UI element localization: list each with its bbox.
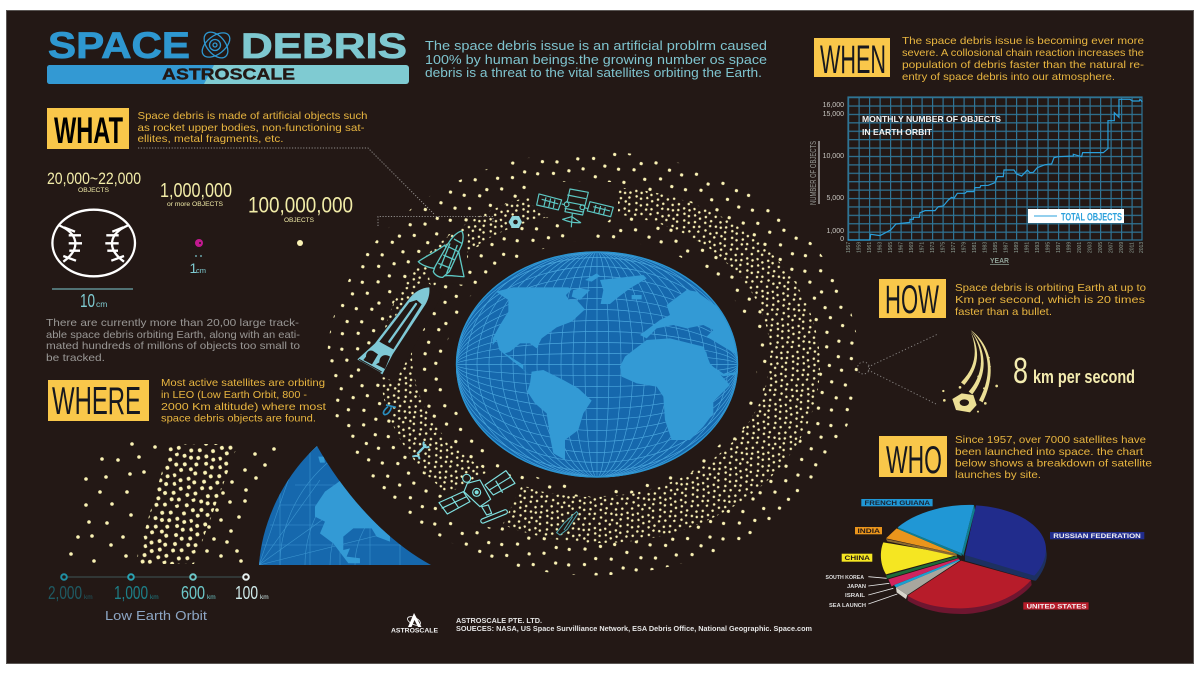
- what text: as rocket upper bodies, non-functioning sat-: [138, 122, 365, 134]
- sector grid: [259, 446, 401, 565]
- heading: when: WHEN: [820, 38, 886, 82]
- orbit altitude scale: 600: [181, 583, 205, 603]
- scale line: 10 cm: 10: [80, 291, 95, 311]
- y axis labels: 5,000: [826, 195, 844, 202]
- x axis labels: 2005: [1098, 242, 1104, 253]
- x axis labels: 1983: [982, 242, 988, 253]
- stat: 8 km per second: km per second: [1033, 367, 1135, 387]
- x axis labels: 1989: [1014, 242, 1020, 253]
- stat: 1,000,000 objects: [160, 180, 232, 208]
- what text: [138, 110, 368, 145]
- stat: 8 km per second: 8: [1013, 350, 1028, 391]
- heading: how: HOW: [885, 278, 939, 322]
- heading: what: [47, 108, 129, 151]
- icon: wrench: [412, 442, 429, 459]
- icon: space shuttle: [418, 231, 464, 277]
- where text: [161, 377, 326, 424]
- how text: Space debris is orbiting Earth at up to: [955, 282, 1146, 294]
- icon: atom: [198, 28, 234, 62]
- icon: tiny debris dot: [297, 240, 303, 246]
- orbit altitude scale: 1,000: [114, 583, 148, 603]
- footer credits: SOUECES: NASA, US Space Survilliance Network, ESA Debris Office, National Geographic. Space.com: [456, 626, 812, 633]
- pie chart: [868, 505, 1047, 614]
- y axis title: [809, 141, 819, 205]
- how text: Km per second, which is 20 times: [955, 294, 1145, 306]
- orbit altitude scale: km: [84, 594, 93, 601]
- footer credits: ASTROSCALE PTE. LTD.: [456, 618, 542, 625]
- tracking text: There are currently more than 20,00 large track-: [46, 317, 300, 329]
- icon: satellite bottom: [439, 471, 515, 524]
- intro text: debris is a threat to the vital satellites orbiting the Earth.: [425, 65, 762, 80]
- heading: who: [879, 436, 947, 482]
- pie small labels: [826, 575, 866, 609]
- pie small labels: SEA LAUNCH: [829, 603, 866, 609]
- icon: hammer fragment: [383, 405, 396, 415]
- y axis labels: 15,000: [823, 111, 844, 118]
- panel: how: [858, 278, 1146, 413]
- when text: severe. A collosional chain reaction increases the: [902, 47, 1144, 59]
- panel: when: [809, 35, 1145, 265]
- x axis labels: 1997: [1056, 242, 1062, 253]
- x axis title: YEAR: [990, 258, 1009, 265]
- pie label: french guiana: [861, 499, 933, 507]
- pie label: united states: UNITED STATES: [1026, 603, 1087, 610]
- who text: Since 1957, over 7000 satellites have: [955, 434, 1146, 446]
- y axis labels: [823, 102, 844, 243]
- title: SPACE: [48, 25, 190, 66]
- footer logo: [391, 613, 439, 634]
- x axis labels: 2013: [1139, 242, 1145, 253]
- x axis labels: 1981: [972, 242, 978, 253]
- x axis labels: [846, 242, 1145, 253]
- chart title: MONTHLY NUMBER OF OBJECTS: [862, 114, 1001, 124]
- orbit altitude scale: km: [207, 594, 216, 601]
- icon: bottle fragment: [557, 512, 578, 535]
- x axis labels: 1977: [951, 242, 957, 253]
- line chart: [809, 97, 1145, 265]
- y axis labels: 1,000: [826, 228, 844, 235]
- x axis labels: 1971: [920, 242, 926, 253]
- pie label: french guiana: FRENCH GUIANA: [864, 500, 930, 507]
- stat: 100,000,000 objects: OBJECTS: [284, 217, 315, 224]
- chart title: [862, 114, 1001, 137]
- how text: faster than a bullet.: [955, 306, 1052, 318]
- what text: Space debris is made of artificial objects such: [138, 110, 368, 122]
- x axis labels: 2009: [1119, 242, 1125, 253]
- pie small labels: ISRAIL: [845, 593, 866, 599]
- x axis labels: 2001: [1077, 242, 1083, 253]
- x axis labels: 1973: [930, 242, 936, 253]
- globe: [456, 252, 740, 478]
- footer logo: ASTROSCALE: [391, 628, 439, 634]
- x axis labels: 1985: [993, 242, 999, 253]
- icon: satellite top: [537, 189, 613, 227]
- x axis labels: 1979: [962, 242, 968, 253]
- chart title: IN EARTH ORBIT: [862, 127, 933, 137]
- pie label: india: [855, 527, 882, 535]
- tracking text: able space debris orbiting Earth, along with an eati-: [46, 329, 301, 341]
- intro text: [425, 38, 767, 80]
- scale line: 10 cm: [52, 289, 133, 311]
- title bar: astroscale: ASTROSCALE: [162, 66, 295, 84]
- heading: when: [814, 38, 890, 82]
- stat: 1,000,000 objects: 1,000,000: [160, 180, 232, 202]
- x axis labels: 1967: [898, 242, 904, 253]
- x axis labels: 2011: [1130, 242, 1136, 253]
- x axis labels: 1969: [909, 242, 915, 253]
- x axis labels: 1999: [1066, 242, 1072, 253]
- intro text: 100% by human beings.the growing number os space: [425, 52, 767, 67]
- pie label: russian federation: [1050, 532, 1144, 540]
- leo sparse debris: [71, 444, 274, 561]
- how text: [955, 282, 1146, 318]
- y axis labels: 16,000: [823, 102, 844, 109]
- where text: space debris objects are found.: [161, 412, 316, 424]
- pie label: china: CHINA: [844, 555, 870, 562]
- sector land: [315, 457, 390, 563]
- intro text: The space debris issue is an artificial problrm caused: [425, 38, 767, 53]
- stat: 1,000,000 objects: or more OBJECTS: [167, 201, 224, 208]
- pie label: russian federation: RUSSIAN FEDERATION: [1053, 533, 1141, 540]
- when text: population of debris faster than the natural re-: [902, 59, 1145, 71]
- icon: hex nut fragment: [508, 216, 522, 228]
- orbit altitude scale: [48, 574, 269, 603]
- stat: 20,000 objects: [47, 170, 141, 194]
- where text: 2000 Km altitude) where most: [161, 401, 326, 413]
- pie label: united states: [1023, 602, 1089, 610]
- tracking text: mated hundreds of millons of objects too small to: [46, 340, 300, 352]
- where text: Most active satellites are orbiting: [161, 377, 325, 389]
- y axis labels: 10,000: [823, 153, 844, 160]
- panel: what: [46, 108, 493, 364]
- y axis title: NUMBER OF OBJECTS: [809, 141, 818, 205]
- x axis labels: 1959: [856, 242, 862, 253]
- icon: rocket: [357, 287, 429, 374]
- caption: low earth orbit: Low Earth Orbit: [105, 608, 207, 623]
- who text: below shows a breakdown of satellite: [955, 458, 1152, 470]
- data line: [848, 99, 1142, 240]
- heading: what: WHAT: [54, 110, 123, 151]
- tracking text: be tracked.: [46, 352, 105, 364]
- x axis labels: 1963: [878, 242, 884, 253]
- what text: ellites, metal fragments, etc.: [138, 133, 284, 145]
- x axis labels: 1991: [1024, 242, 1030, 253]
- icon: meteor fragment: [942, 330, 998, 413]
- debris field: sparse rings: [327, 152, 859, 576]
- x axis labels: 1961: [867, 242, 873, 253]
- leo dense debris band: [135, 444, 238, 564]
- x axis labels: 2003: [1088, 242, 1094, 253]
- y axis labels: 0: [840, 236, 844, 243]
- stat: 20,000 objects: OBJECTS: [78, 187, 110, 194]
- debris field: dense ring: [380, 187, 820, 543]
- who text: been launched into space. the chart: [955, 446, 1143, 458]
- icon: 1 cm debris: [190, 239, 206, 276]
- heading: where: WHERE: [52, 380, 141, 423]
- title: DEBRIS: [241, 27, 407, 66]
- icon: 1 cm debris: cm: [196, 266, 206, 275]
- scale line: 10 cm: cm: [96, 299, 107, 309]
- dotted callout line: [138, 148, 493, 226]
- x axis labels: 1995: [1046, 242, 1052, 253]
- pie label: china: [842, 554, 872, 562]
- icon: 1 cm debris: 1: [190, 260, 198, 276]
- where text: in LEO (Low Earth Orbit, 800 -: [161, 389, 308, 401]
- x axis labels: 1993: [1035, 242, 1041, 253]
- who text: [955, 434, 1152, 481]
- dotted zoom lines: [858, 334, 938, 405]
- pie small labels: JAPAN: [847, 584, 866, 590]
- heading: where: [48, 380, 149, 423]
- orbit altitude scale: km: [260, 594, 269, 601]
- stat: 20,000 objects: 20,000~22,000: [47, 170, 141, 188]
- x axis labels: 1975: [940, 242, 946, 253]
- panel: where: [48, 378, 431, 620]
- orbit altitude scale: 100: [235, 583, 258, 603]
- footer credits: [456, 618, 812, 633]
- stat: 8 km per second: [1013, 350, 1135, 391]
- pie small labels: SOUTH KOREA: [826, 575, 864, 581]
- orbit altitude scale: 2,000: [48, 583, 82, 603]
- heading: how: [879, 278, 946, 322]
- x axis labels: 2007: [1108, 242, 1114, 253]
- x axis labels: 1957: [846, 242, 852, 253]
- when text: entry of space debris into our atmosphere.: [902, 71, 1115, 83]
- when text: The space debris issue is becoming ever more: [902, 35, 1144, 47]
- tracking text: [46, 317, 301, 364]
- grid lines: [456, 252, 738, 478]
- heading: who: WHO: [886, 439, 942, 482]
- x axis labels: 1987: [1004, 242, 1010, 253]
- icon: baseball: [52, 210, 135, 276]
- legend: [1028, 209, 1124, 224]
- title bar: astroscale: [47, 65, 409, 84]
- legend: TOTAL OBJECTS: [1061, 212, 1122, 224]
- continents: [493, 273, 740, 460]
- title: [48, 25, 407, 66]
- stat: 100,000,000 objects: 100,000,000: [248, 192, 353, 218]
- orbit altitude scale: km: [150, 594, 159, 601]
- earth sector: [259, 446, 431, 565]
- pie label: india: INDIA: [858, 528, 880, 535]
- when text: [902, 35, 1145, 83]
- panel: who: [826, 434, 1152, 614]
- who text: launches by site.: [955, 469, 1041, 481]
- x axis labels: 1965: [888, 242, 894, 253]
